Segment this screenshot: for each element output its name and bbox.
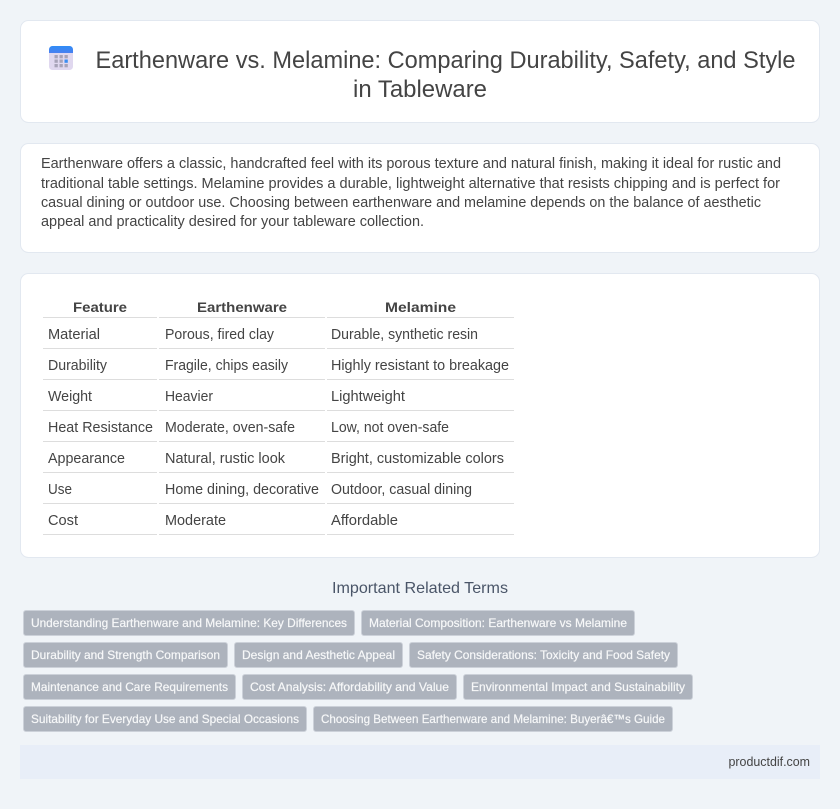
intro text: appeal and practicality desired for your tableware collection. [41, 214, 424, 230]
row: cost [48, 513, 398, 529]
footer [20, 745, 820, 779]
table header [73, 299, 456, 315]
row: use: Use [48, 482, 72, 498]
intro text [41, 156, 781, 230]
row: appearance: Natural, rustic look [165, 451, 286, 467]
heading [96, 47, 796, 103]
chip labels: Design and Aesthetic Appeal [242, 648, 395, 662]
row: weight: Heavier [165, 389, 213, 405]
row: appearance: Appearance [48, 451, 125, 467]
row: material: Porous, fired clay [165, 327, 275, 343]
row: weight: Weight [48, 389, 92, 405]
chip labels: Suitability for Everyday Use and Special Occasions [31, 712, 299, 726]
row: durability: Durability [48, 358, 108, 374]
row: cost: Cost [48, 513, 78, 529]
footer: productdif.com [728, 755, 810, 769]
chip labels [31, 616, 685, 726]
chip labels: Choosing Between Earthenware and Melamine: Buyerâ€™s Guide [321, 712, 665, 726]
heading: Earthenware vs. Melamine: Comparing Durability, Safety, and Style [96, 47, 796, 74]
chip labels: Cost Analysis: Affordability and Value [250, 680, 449, 694]
row: heat resistance: Low, not oven-safe [331, 420, 449, 436]
table header: Feature [73, 299, 127, 315]
row: material: Durable, synthetic resin [331, 327, 478, 343]
chip labels: Material Composition: Earthenware vs Melamine [369, 616, 627, 630]
row: use [48, 482, 472, 498]
chip labels: Durability and Strength Comparison [31, 648, 220, 662]
table header: Earthenware [197, 299, 287, 315]
row: use: Outdoor, casual dining [331, 482, 472, 498]
table header: Melamine [385, 299, 456, 315]
chip labels: Environmental Impact and Sustainability [471, 680, 685, 694]
row: appearance: Bright, customizable colors [331, 451, 504, 467]
row: weight: Lightweight [331, 389, 405, 405]
icon: calendar [49, 46, 73, 70]
table rules [43, 317, 514, 535]
row: durability: Fragile, chips easily [165, 358, 289, 374]
row: cost: Affordable [331, 513, 398, 529]
heading: in Tableware [353, 76, 487, 103]
row: durability: Highly resistant to breakage [331, 358, 509, 374]
intro text: casual dining or outdoor use. Choosing between earthenware and melamine depends on the balance of aesthetic [41, 195, 761, 211]
row: durability [48, 358, 509, 374]
row: appearance [48, 451, 504, 467]
panel: introduction [20, 144, 820, 252]
panel: title [20, 20, 820, 122]
row: heat resistance: Heat Resistance [48, 420, 153, 436]
chip labels: Maintenance and Care Requirements [31, 680, 228, 694]
row: use: Home dining, decorative [165, 482, 319, 498]
chip labels: Safety Considerations: Toxicity and Food Safety [417, 648, 670, 662]
row: weight [48, 389, 405, 405]
related terms chips [24, 610, 692, 732]
row: material [48, 327, 478, 343]
row: heat resistance: Moderate, oven-safe [165, 420, 295, 436]
heading: related terms: Important Related Terms [332, 580, 508, 597]
panel: comparison table [20, 274, 820, 558]
chip labels: Understanding Earthenware and Melamine: Key Differences [31, 616, 347, 630]
row: material: Material [48, 327, 100, 343]
intro text: traditional table settings. Melamine provides a durable, lightweight alternative that resists chipping and is perfect for [41, 176, 780, 192]
row: heat resistance [48, 420, 449, 436]
intro text: Earthenware offers a classic, handcrafted feel with its porous texture and natural finish, making it ideal for rustic and [41, 156, 781, 172]
row: cost: Moderate [165, 513, 226, 529]
